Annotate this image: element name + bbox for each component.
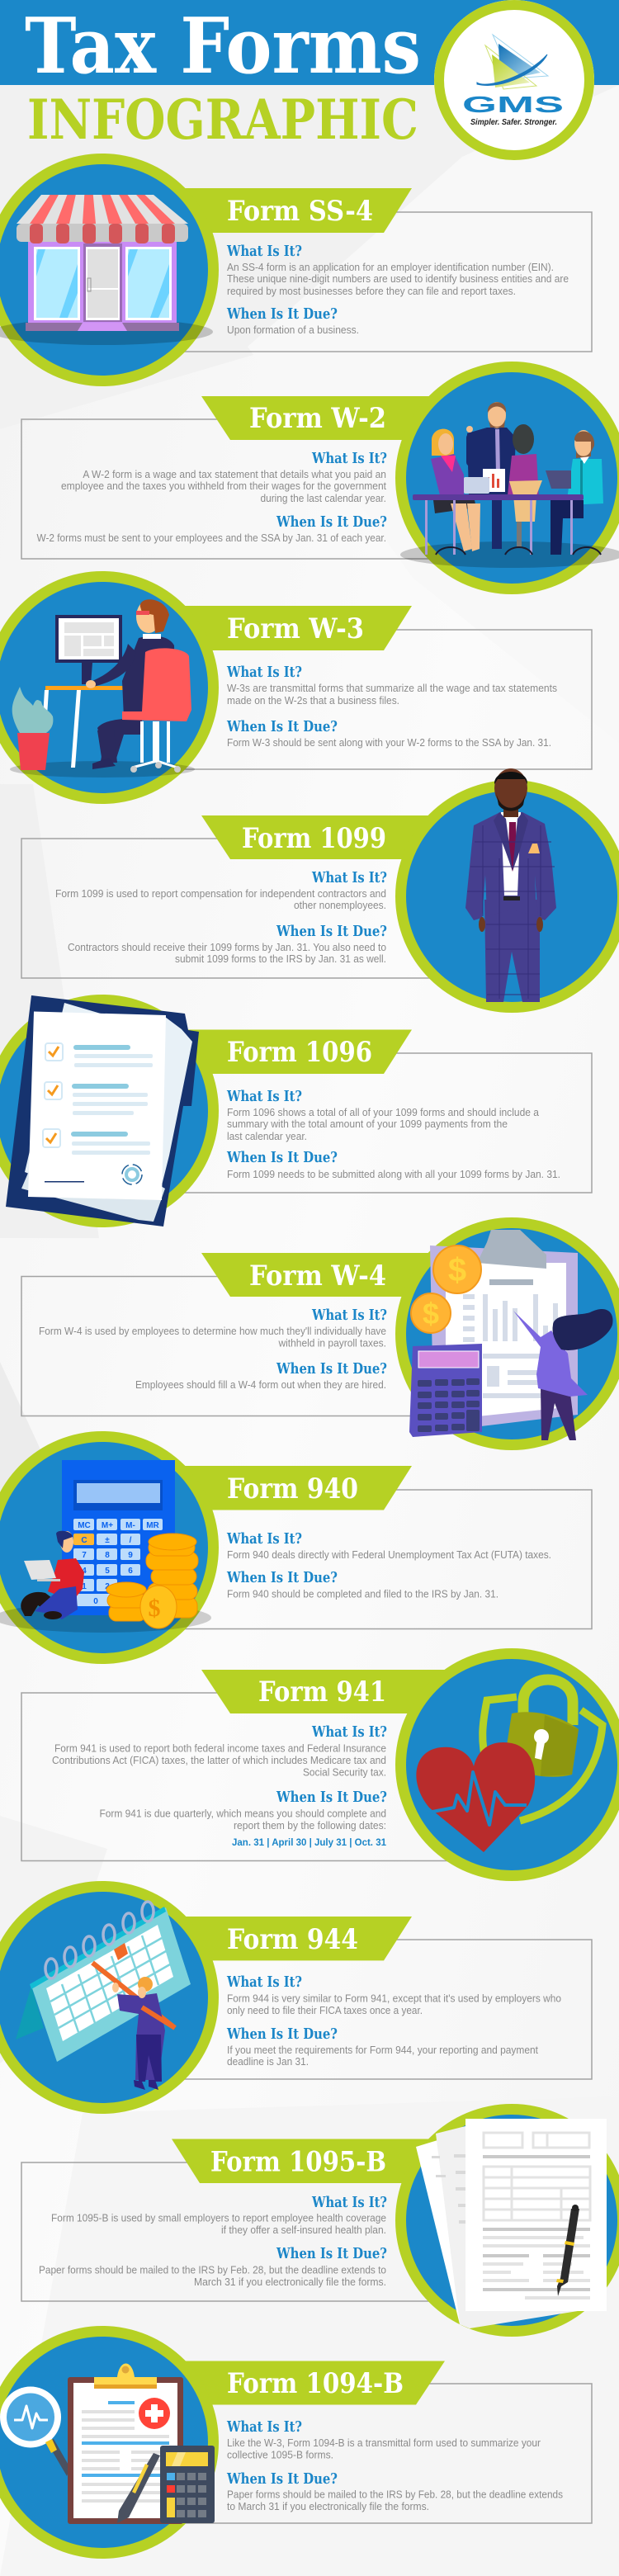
text: when is it due: Contractors should receive their 1099 forms by Jan. 31. You also need to [68,942,386,953]
panel: Form W-2 [21,362,619,594]
text: when is it due: Paper forms should be mailed to the IRS by Feb. 28, but the deadline extends to [39,2265,386,2276]
text: what is it: summary with the total amount of your 1099 payments from the [227,1118,508,1130]
text: when is it due: Paper forms should be mailed to the IRS by Feb. 28, but the deadline extends [227,2489,563,2501]
text: what is it: last calendar year. [227,1131,307,1142]
panel: Form SS-4 [0,154,592,386]
text: what is it: W-3s are transmittal forms that summarize all the wage and tax statements [227,683,557,694]
text: what is it: withheld in payroll taxes. [278,1337,386,1349]
icon: medical clipboard, magnifier, calculator [0,2364,215,2524]
icon: calculator, coins, person with laptop: MR [146,1521,160,1530]
panel: Form 944 [0,1881,592,2114]
panel: Form 1096 [0,995,592,1227]
text: what is it: Form W-4 is used by employees to determine how much they'll individually have [39,1326,386,1337]
text: when is it due: When Is It Due? [276,923,387,940]
text: when is it due: Form 1099 needs to be submitted along with all your 1099 forms by Jan. 31. [227,1169,560,1180]
text: when is it due: When Is It Due? [276,1789,387,1806]
panel: Form 1094-B [0,2326,592,2559]
text: when is it due: When Is It Due? [226,718,338,735]
icon: calculator, coins, person with laptop: 0 [93,1597,98,1606]
banner title: Form W-3 [227,612,364,645]
banner title: Form SS-4 [227,195,373,228]
icon: calculator, coins, person with laptop: M- [125,1521,135,1530]
text: what is it: What Is It? [311,1723,387,1741]
panel: Form 1099 [21,768,619,1013]
text: what is it [61,450,387,504]
icon: clipboard, coins, calculator, woman [409,1230,613,1440]
text: when is it due: Form W-3 should be sent along with your W-2 forms to the SSA by Jan. 31. [227,737,551,749]
banner title: Form 941 [258,1676,386,1709]
text: what is it: What Is It? [226,1530,302,1548]
text: what is it: What Is It? [311,869,387,886]
panel: Form 1095-B [21,2104,619,2337]
text: what is it: employee and the taxes you withheld from their wages for the government [61,480,387,492]
text: what is it [52,1723,387,1778]
text: what is it: Like the W-3, Form 1094-B is a transmittal form used to summarize your [227,2437,541,2449]
text: when is it due: When Is It Due? [226,1569,338,1586]
text: when is it due: March 31 if you electronically file the forms. [194,2276,386,2288]
text: what is it: Form 1099 is used to report compensation for independent contractors and [55,888,386,900]
logo badge: GMS [462,92,564,117]
text: when is it due: When Is It Due? [226,2025,338,2043]
icon: calculator, coins, person with laptop: 5 [105,1567,110,1576]
text: when is it due [226,718,551,749]
text: when is it due [226,305,359,336]
text: what is it [226,1088,539,1142]
text: what is it: Contributions Act (FICA) taxes, the latter of which includes Medicare tax and [52,1755,386,1766]
text: what is it: Form 941 is used to report both federal income taxes and Federal Insurance [54,1743,386,1755]
text: what is it: An SS-4 form is an application for an employer identification number (EIN). [227,262,554,273]
text: what is it [51,2194,387,2236]
icon: calculator, coins, person with laptop: MC [78,1521,91,1530]
text: what is it [226,2418,541,2461]
icon: calculator, coins, person with laptop: 9 [128,1551,133,1560]
text: when is it due [36,513,387,544]
icon: clipboard checklist [6,995,199,1227]
text: what is it: These unique nine-digit numbers are used to identify business entities and are [227,273,569,285]
icon: man in suit [465,768,556,1002]
text: when is it due: Form 941 is due quarterly, which means you should complete and [99,1808,386,1819]
icon: calculator, coins, person with laptop: 1 [82,1582,87,1591]
panel: Form 940 [0,1431,592,1664]
icon: person at desk [10,599,195,778]
text: when is it due [135,1360,387,1391]
logo badge [434,0,594,160]
banner title: Form 1094-B [227,2367,404,2400]
text: what is it: made on the W-2s that a business files. [227,695,399,707]
text: what is it: What Is It? [226,664,302,681]
icon: clipboard, coins, calculator, woman: $ [423,1297,439,1331]
text: when is it due [39,2245,387,2288]
icon: calculator, coins, person with laptop: / [130,1536,132,1545]
title: Tax Forms: Tax Forms [25,1,421,91]
banner title: Form 944 [227,1923,358,1956]
text: what is it: Form 940 deals directly with Federal Unemployment Tax Act (FUTA) taxes. [227,1549,551,1561]
text: what is it [55,869,387,911]
icon: team at a table [400,402,619,568]
text: when is it due: Upon formation of a business. [227,324,359,336]
text: what is it [226,664,557,707]
text: what is it [226,1973,561,2016]
text: what is it: What Is It? [311,450,387,467]
banner title: Form 1096 [227,1036,372,1069]
icon: paper forms and pen [416,2119,607,2328]
text: when is it due [99,1789,387,1848]
text: what is it: What Is It? [311,1307,387,1324]
icon: calculator, coins, person with laptop: ± [105,1536,110,1545]
text: what is it: Form 944 is very similar to Form 941, except that it's used by employers who [227,1993,561,2005]
banner title: Form 1095-B [210,2146,386,2179]
icon: calculator, coins, person with laptop: 2 [105,1582,110,1591]
title: Infographic: INFOGRAPHIC [27,87,418,152]
text: what is it [226,1530,551,1561]
text: when is it due: When Is It Due? [276,513,387,531]
panel: Form 941 [21,1648,619,1881]
text: when is it due: When Is It Due? [276,2245,387,2262]
icon: calculator, coins, person with laptop: C [81,1536,87,1545]
banner title: Form W-4 [249,1260,386,1293]
icon: calculator, coins, person with laptop [0,1460,211,1633]
text: when is it due: When Is It Due? [276,1360,387,1378]
icon: calculator, coins, person with laptop: 8 [105,1551,110,1560]
text: when is it due [68,923,387,965]
text: when is it due: When Is It Due? [226,1149,338,1166]
panel: Form W-3 [0,571,592,804]
text: when is it due: W-2 forms must be sent to your employees and the SSA by Jan. 31 of each year. [36,532,386,544]
icon: calculator, coins, person with laptop: 7 [82,1551,87,1560]
text: when is it due: Form 940 should be completed and filed to the IRS by Jan. 31. [227,1588,499,1600]
logo badge: Simpler. Safer. Stronger. [470,118,557,127]
panel: Form W-4 [21,1217,619,1450]
icon: calendar with pencil [16,1902,191,2090]
banner title: Form 1099 [242,822,386,855]
text: what is it: What Is It? [226,243,302,260]
text: what is it [39,1307,387,1349]
text: what is it: Social Security tax. [303,1766,386,1778]
icon: calculator, coins, person with laptop: 4 [82,1567,87,1576]
header band [0,0,619,85]
text: when is it due: If you meet the requirements for Form 944, your reporting and payment [227,2044,538,2056]
text: what is it: required by most businesses before they can file and report taxes. [227,286,516,297]
text: what is it: What Is It? [226,1088,302,1105]
text: what is it: if they offer a self-insured health plan. [221,2224,386,2236]
text: what is it: only need to file their FICA taxes once a year. [227,2005,423,2016]
text: what is it: What Is It? [311,2194,387,2211]
icon: padlock and heart [416,1680,602,1852]
text: what is it: during the last calendar year. [261,493,386,504]
text: when is it due: Employees should fill a W-4 form out when they are hired. [135,1379,386,1391]
icon: calculator, coins, person with laptop: M+ [102,1521,113,1530]
text: when is it due: When Is It Due? [226,2470,338,2488]
text: when is it due [226,1569,499,1600]
text: what is it: A W-2 form is a wage and tax statement that details what you paid an [83,469,386,480]
text: when is it due: Jan. 31 | April 30 | July 31 | Oct. 31 [232,1836,386,1848]
text: what is it: collective 1095-B forms. [227,2450,333,2461]
text: when is it due [226,2470,563,2512]
text: when is it due: When Is It Due? [226,305,338,323]
text: what is it: Form 1095-B is used by small employers to report employee health coverage [51,2213,386,2224]
banner title: Form 940 [227,1472,358,1505]
text: when is it due: deadline is Jan 31. [227,2056,309,2068]
text: when is it due: to March 31 if you electronically file the forms. [227,2501,429,2512]
icon: clipboard, coins, calculator, woman: $ [448,1252,466,1288]
banner title: Form W-2 [249,402,386,435]
text: what is it: Form 1096 shows a total of all of your 1099 forms and should include a [227,1107,539,1118]
icon: storefront [0,195,213,345]
icon: calculator, coins, person with laptop: $ [149,1595,160,1622]
text: when is it due: submit 1099 forms to the IRS by Jan. 31 as well. [175,953,386,965]
text: what is it: other nonemployees. [294,900,386,911]
text: what is it [226,243,569,297]
text: when is it due: report them by the following dates: [234,1820,386,1832]
text: what is it: What Is It? [226,2418,302,2436]
text: when is it due [226,1149,560,1180]
icon: calculator, coins, person with laptop: 6 [128,1567,133,1576]
text: when is it due [226,2025,538,2068]
text: what is it: What Is It? [226,1973,302,1991]
